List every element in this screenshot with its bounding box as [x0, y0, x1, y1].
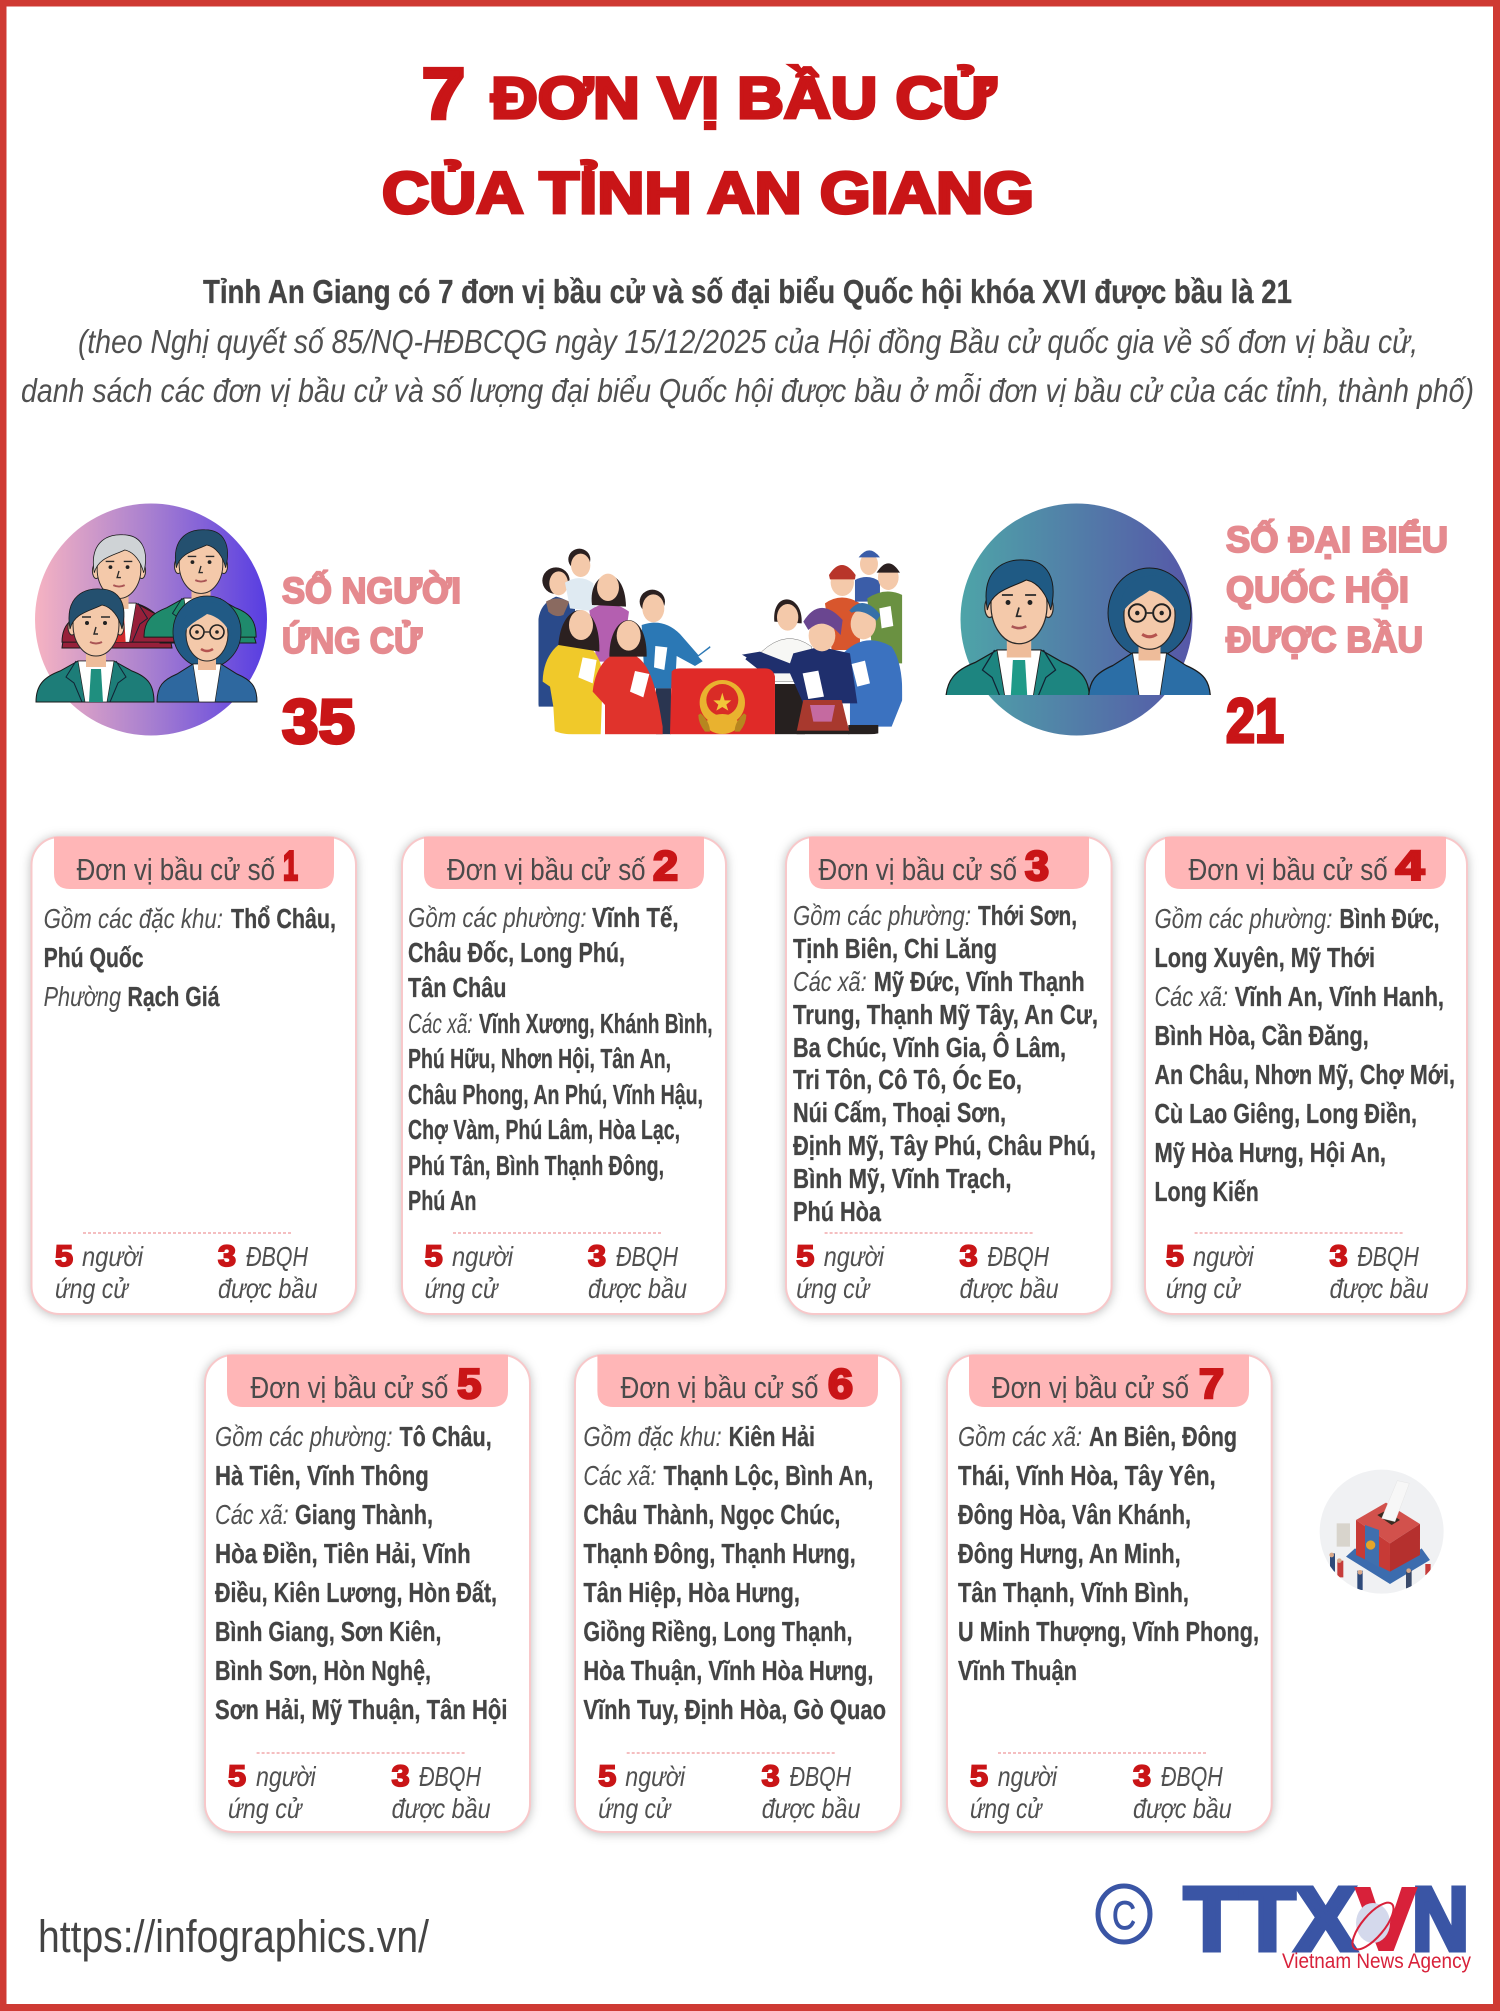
panel: unit 3 — [786, 837, 1112, 1314]
intro text — [21, 273, 1474, 409]
stats: unit 1: người — [82, 1241, 144, 1272]
stat: candidates — [282, 569, 461, 757]
text: unit 7 localities — [958, 1421, 1259, 1686]
header: unit 4: 4 — [1396, 842, 1425, 889]
stats: unit 3: được bầu — [960, 1273, 1059, 1304]
text: unit 3 localities: Núi Cấm, Thoại Sơn, — [793, 1097, 1006, 1128]
text: unit 6 localities: Hòa Thuận, Vĩnh Hòa Hưng, — [583, 1655, 873, 1686]
text: unit 2 localities: Các xã: — [408, 1008, 473, 1039]
text: unit 6 localities: Kiên Hải — [729, 1421, 815, 1452]
text: unit 4 localities: Gồm các phường: — [1154, 903, 1332, 934]
stats: unit 3: 5 — [796, 1240, 814, 1273]
title: CỦA TỈNH AN GIANG — [382, 161, 1034, 226]
stats: unit 2: 5 — [425, 1240, 443, 1273]
stats: unit 1: 5 — [55, 1240, 73, 1273]
header: unit 3 — [809, 837, 1089, 889]
text: unit 6 localities: Gồm đặc khu: — [583, 1421, 722, 1452]
text: unit 7 localities: Đông Hưng, An Minh, — [958, 1538, 1181, 1569]
text: unit 5 localities: Hà Tiên, Vĩnh Thông — [215, 1460, 429, 1491]
text: unit 3 localities: Bình Mỹ, Vĩnh Trạch, — [793, 1163, 1012, 1194]
stats: unit 4 — [1166, 1240, 1429, 1304]
illustration: voters around ballot box — [538, 549, 902, 734]
stats: unit 2 — [425, 1240, 687, 1304]
text: unit 5 localities: Hòa Điền, Tiên Hải, Vĩnh — [215, 1538, 471, 1569]
text: unit 4 localities: Bình Đức, — [1340, 903, 1440, 934]
text: unit 1 localities: Phú Quốc — [44, 942, 144, 973]
stat: deputies elected: 21 — [1226, 687, 1284, 756]
text: unit 4 localities: Các xã: — [1154, 981, 1228, 1012]
header: unit 5: 5 — [457, 1360, 481, 1407]
text: unit 6 localities: Các xã: — [583, 1460, 656, 1491]
header: unit 3: 3 — [1025, 842, 1049, 889]
text: unit 2 localities — [408, 902, 713, 1216]
text: unit 2 localities: Vĩnh Xương, Khánh Bình, — [479, 1008, 713, 1039]
logo: TTXVN: V — [1355, 1870, 1417, 1970]
header: unit 4 — [1165, 837, 1446, 889]
header: unit 1: Đơn vị bầu cử số — [77, 852, 275, 887]
text: unit 5 localities: Giang Thành, — [295, 1499, 433, 1530]
text: unit 3 localities: Định Mỹ, Tây Phú, Châu Phú, — [793, 1130, 1096, 1161]
stats: unit 6: ứng cử — [598, 1793, 672, 1824]
text: unit 7 localities: Vĩnh Thuận — [958, 1655, 1077, 1686]
title: ĐƠN VỊ BẦU CỬ — [491, 66, 997, 131]
stats: unit 5: ĐBQH — [419, 1761, 482, 1792]
text: unit 4 localities: Cù Lao Giêng, Long Điền, — [1154, 1098, 1417, 1129]
stats: unit 2: ứng cử — [425, 1273, 499, 1304]
stats: unit 4: ứng cử — [1166, 1273, 1242, 1304]
text: unit 7 localities: Đông Hòa, Vân Khánh, — [958, 1499, 1191, 1530]
stat: candidates: SỐ NGƯỜI — [282, 569, 461, 611]
text: unit 7 localities: U Minh Thượng, Vĩnh Phong, — [958, 1616, 1259, 1647]
text: unit 5 localities: Tô Châu, — [400, 1421, 492, 1452]
stats: unit 2: được bầu — [588, 1273, 687, 1304]
logo: TTXVN: Vietnam News Agency — [1282, 1950, 1471, 1973]
stats: unit 1: ứng cử — [55, 1273, 130, 1304]
text: unit 5 localities — [215, 1421, 508, 1725]
text: unit 3 localities — [793, 900, 1098, 1227]
stats: unit 3 — [796, 1240, 1059, 1304]
text: unit 4 localities: Long Kiến — [1154, 1176, 1259, 1207]
text: unit 3 localities: Tịnh Biên, Chi Lăng — [793, 933, 997, 964]
stats: unit 4: người — [1193, 1241, 1254, 1272]
stats: unit 5: được bầu — [392, 1793, 491, 1824]
stats: unit 6: ĐBQH — [790, 1761, 852, 1792]
header: unit 1 — [54, 837, 334, 889]
stats: unit 4: 3 — [1330, 1240, 1348, 1273]
text: unit 2 localities: Châu Đốc, Long Phú, — [408, 937, 625, 968]
stats: unit 6 — [598, 1760, 861, 1824]
text: unit 1 localities: Thổ Châu, — [231, 903, 336, 934]
panel: unit 6 — [575, 1355, 901, 1832]
logo: TTXVN: TTX — [1184, 1870, 1356, 1970]
text: unit 3 localities: Thới Sơn, — [978, 900, 1077, 931]
stats: unit 1: được bầu — [218, 1273, 318, 1304]
logo: TTXVN: C — [1112, 1894, 1136, 1938]
text: unit 4 localities: Vĩnh An, Vĩnh Hanh, — [1235, 981, 1444, 1012]
stat: deputies elected: ĐƯỢC BẦU — [1226, 619, 1423, 660]
text: unit 6 localities: Thạnh Lộc, Bình An, — [664, 1460, 873, 1491]
text: unit 6 localities: Vĩnh Tuy, Định Hòa, Gò Quao — [583, 1694, 886, 1725]
stats: unit 7 — [970, 1760, 1232, 1824]
text: unit 6 localities — [583, 1421, 886, 1725]
stats: unit 7: ĐBQH — [1161, 1761, 1223, 1792]
stats: unit 5: ứng cử — [228, 1793, 304, 1824]
text: unit 7 localities: An Biên, Đông — [1089, 1421, 1237, 1452]
text: unit 2 localities: Tân Châu — [408, 972, 506, 1003]
text: unit 2 localities: Châu Phong, An Phú, Vĩnh Hậu, — [408, 1079, 703, 1110]
text: unit 3 localities: Gồm các phường: — [793, 900, 971, 931]
logo: TTXVN — [1098, 1870, 1471, 1973]
text: unit 7 localities: Tân Thạnh, Vĩnh Bình, — [958, 1577, 1189, 1608]
text: unit 3 localities: Các xã: — [793, 966, 867, 997]
header: unit 2: Đơn vị bầu cử số — [447, 852, 646, 887]
stats: unit 5: 3 — [392, 1760, 410, 1793]
text: unit 2 localities: Phú Tân, Bình Thạnh Đông, — [408, 1150, 664, 1181]
header: unit 6 — [597, 1355, 878, 1407]
stats: unit 5: người — [256, 1761, 316, 1792]
text: unit 6 localities: Giồng Riềng, Long Thạnh, — [583, 1616, 852, 1647]
intro text: Tỉnh An Giang có 7 đơn vị bầu cử và số đại biểu Quốc hội khóa XVI được bầu là 21 — [203, 273, 1292, 310]
text: unit 7 localities: Gồm các xã: — [958, 1421, 1082, 1452]
panel: unit 2 — [402, 837, 726, 1314]
title: 7 — [422, 55, 465, 134]
stats: unit 5 — [228, 1760, 491, 1824]
panel: unit 5 — [205, 1355, 530, 1832]
stats: unit 3: ĐBQH — [988, 1241, 1050, 1272]
text: unit 1 localities: Phường — [44, 981, 121, 1012]
title — [382, 55, 1034, 226]
stats: unit 1 — [55, 1240, 318, 1304]
stats: unit 6: 5 — [598, 1760, 616, 1793]
stats: unit 1: ĐBQH — [246, 1241, 309, 1272]
text: unit 4 localities: Mỹ Hòa Hưng, Hội An, — [1154, 1137, 1386, 1168]
stat: deputies elected: QUỐC HỘI — [1226, 568, 1409, 610]
source url: https://infographics.vn/ — [38, 1911, 429, 1962]
text: unit 1 localities: Gồm các đặc khu: — [44, 903, 223, 934]
stats: unit 2: người — [452, 1241, 514, 1272]
panel: unit 4 — [1145, 837, 1467, 1314]
stats: unit 2: ĐBQH — [616, 1241, 679, 1272]
header: unit 7 — [969, 1355, 1249, 1407]
header: unit 4: Đơn vị bầu cử số — [1188, 852, 1388, 887]
stats: unit 3: 3 — [960, 1240, 978, 1273]
header: unit 7: Đơn vị bầu cử số — [992, 1370, 1189, 1405]
stats: unit 6: 3 — [762, 1760, 780, 1793]
text: unit 5 localities: Bình Sơn, Hòn Nghệ, — [215, 1655, 431, 1686]
text: unit 5 localities: Sơn Hải, Mỹ Thuận, Tân Hội — [215, 1694, 508, 1725]
text: unit 2 localities: Gồm các phường: — [408, 902, 586, 933]
stats: unit 7: ứng cử — [970, 1793, 1044, 1824]
panel: unit 1 — [32, 837, 356, 1314]
stats: unit 7: 3 — [1133, 1760, 1151, 1793]
logo: TTXVN: N — [1412, 1870, 1469, 1970]
stats: unit 4: ĐBQH — [1357, 1241, 1419, 1272]
header: unit 5 — [227, 1355, 508, 1407]
stat: candidates: ỨNG CỬ — [282, 619, 422, 661]
text: unit 5 localities: Gồm các phường: — [215, 1421, 392, 1452]
stats: unit 2: 3 — [588, 1240, 606, 1273]
text: unit 6 localities: Châu Thành, Ngọc Chúc, — [583, 1499, 840, 1530]
text: unit 5 localities: Các xã: — [215, 1499, 289, 1530]
panel: unit 7 — [947, 1355, 1272, 1832]
stats: unit 4: được bầu — [1330, 1273, 1429, 1304]
stats: unit 7: 5 — [970, 1760, 988, 1793]
header: unit 6: 6 — [828, 1360, 853, 1407]
text: unit 3 localities: Ba Chúc, Vĩnh Gia, Ô Lâm, — [793, 1031, 1066, 1063]
stat: deputies elected — [1226, 518, 1448, 756]
text: unit 3 localities: Tri Tôn, Cô Tô, Óc Eo, — [793, 1064, 1022, 1095]
header: unit 7: 7 — [1199, 1360, 1224, 1407]
text: unit 4 localities: Bình Hòa, Cần Đăng, — [1154, 1020, 1369, 1051]
icon: two deputies in gradient circle — [946, 504, 1210, 736]
header: unit 3: Đơn vị bầu cử số — [818, 852, 1017, 887]
stats: unit 6: được bầu — [762, 1793, 861, 1824]
stats: unit 3: người — [824, 1241, 885, 1272]
text: unit 2 localities: Phú Hữu, Nhơn Hội, Tân An, — [408, 1043, 671, 1074]
text: unit 5 localities: Điều, Kiên Lương, Hòn Đất, — [215, 1577, 497, 1608]
text: unit 6 localities: Tân Hiệp, Hòa Hưng, — [583, 1577, 800, 1608]
icon: four candidates in gradient circle — [35, 504, 267, 736]
header: unit 2 — [424, 837, 704, 889]
text: unit 3 localities: Mỹ Đức, Vĩnh Thạnh — [874, 966, 1085, 997]
text: unit 2 localities: Chợ Vàm, Phú Lâm, Hòa Lạc, — [408, 1114, 680, 1145]
text: unit 6 localities: Thạnh Đông, Thạnh Hưng, — [583, 1538, 856, 1569]
header: unit 2: 2 — [653, 842, 678, 889]
stats: unit 5: 5 — [228, 1760, 246, 1793]
stats: unit 7: người — [998, 1761, 1058, 1792]
stats: unit 4: 5 — [1166, 1240, 1184, 1273]
stat: deputies elected: SỐ ĐẠI BIỂU — [1226, 518, 1448, 560]
text: unit 3 localities: Phú Hòa — [793, 1196, 881, 1227]
icon: isometric ballot box — [1320, 1470, 1444, 1594]
stat: candidates: 35 — [282, 688, 355, 757]
stats: unit 6: người — [625, 1761, 686, 1792]
stats: unit 3: ứng cử — [796, 1273, 871, 1304]
text: unit 5 localities: Bình Giang, Sơn Kiên, — [215, 1616, 441, 1647]
text: unit 1 localities: Rạch Giá — [128, 981, 220, 1012]
text: unit 1 localities — [44, 903, 336, 1012]
header: unit 5: Đơn vị bầu cử số — [250, 1370, 448, 1405]
text: unit 4 localities — [1154, 903, 1455, 1207]
header: unit 1: 1 — [283, 842, 298, 889]
header: unit 6: Đơn vị bầu cử số — [621, 1370, 818, 1405]
text: unit 7 localities: Thái, Vĩnh Hòa, Tây Yên, — [958, 1460, 1216, 1491]
text: unit 4 localities: Long Xuyên, Mỹ Thới — [1154, 942, 1375, 973]
stats: unit 1: 3 — [218, 1240, 236, 1273]
stats: unit 7: được bầu — [1133, 1793, 1232, 1824]
text: unit 2 localities: Vĩnh Tế, — [592, 902, 679, 933]
text: unit 3 localities: Trung, Thạnh Mỹ Tây, An Cư, — [793, 999, 1098, 1030]
text: unit 2 localities: Phú An — [408, 1185, 476, 1216]
